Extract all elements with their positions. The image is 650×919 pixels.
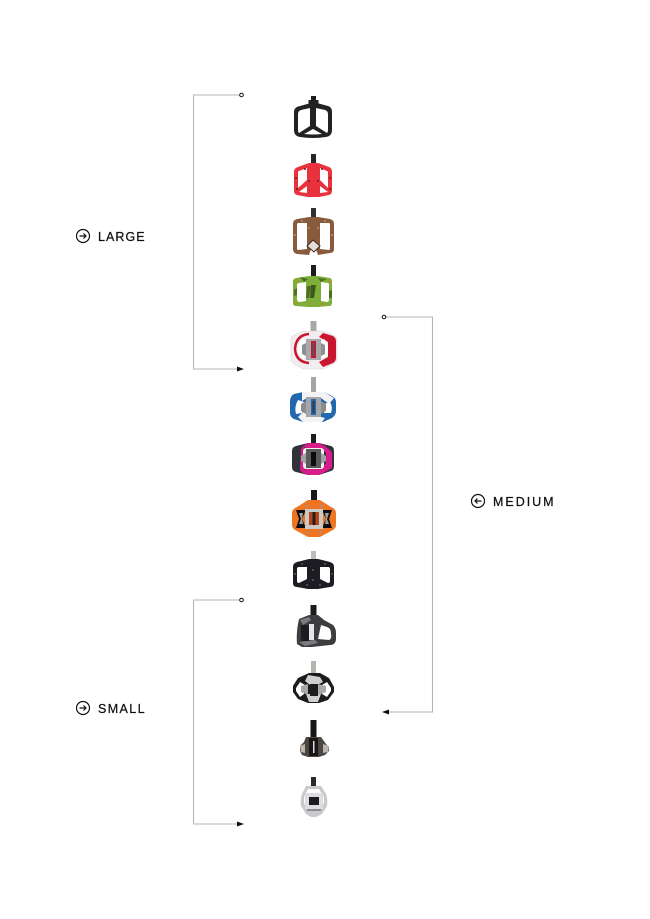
pedal 12: small black clip [300, 720, 329, 757]
bracket: medium [382, 315, 432, 714]
label: small: SMALL [98, 702, 146, 716]
pedal column [290, 96, 337, 817]
pedal 9: black flat wide [293, 551, 334, 589]
pedal 4: green flat [293, 265, 332, 307]
label: small [76, 702, 146, 716]
label: large: LARGE [98, 230, 146, 244]
pedal 10: road clip [297, 605, 336, 647]
pedal 11: black and silver clip [293, 661, 334, 703]
pedal 2: red flat [294, 154, 332, 197]
label: large [76, 230, 146, 244]
pedal 7: pink and black clip [292, 434, 334, 475]
pedal 6: blue and white clip [290, 377, 336, 422]
bracket: small [194, 598, 244, 826]
pedal 8: orange clip [292, 490, 336, 537]
label: medium: MEDIUM [493, 495, 555, 509]
pedal 13: silver eggbeater [301, 777, 327, 817]
pedal 3: brown flat [293, 208, 334, 255]
pedal 5: red and white clip [291, 321, 337, 369]
pedal 1: black flat [294, 96, 332, 138]
bracket: large [194, 93, 244, 371]
